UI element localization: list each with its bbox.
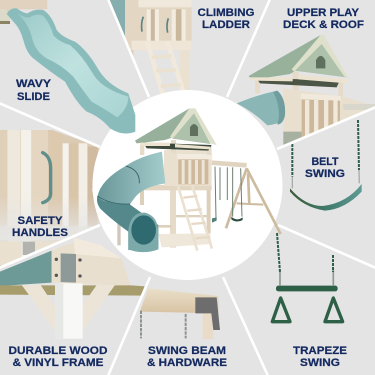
panel: belt swing	[290, 120, 362, 211]
label: belt swing: SWING	[305, 168, 345, 180]
label: swing beam and hardware	[147, 345, 227, 369]
panel: wood and vinyl frame photo	[0, 237, 150, 339]
label: safety handles	[12, 215, 68, 239]
panel: upper deck photo	[237, 35, 375, 152]
panel: climbing ladder photo	[110, 0, 192, 94]
label: swing beam and hardware: SWING BEAM	[148, 345, 226, 357]
deck and railing	[140, 185, 212, 190]
label: wavy slide	[16, 78, 51, 103]
label: belt swing: BELT	[312, 156, 339, 168]
label: trapeze swing: SWING	[300, 357, 340, 369]
label: climbing ladder	[198, 7, 254, 31]
lower tower	[170, 185, 176, 248]
panel: swing beam and hardware	[140, 288, 220, 339]
art: main play set circle	[92, 90, 282, 280]
roof	[143, 143, 212, 151]
ladder	[178, 186, 212, 251]
label: durable wood and vinyl frame	[8, 345, 108, 369]
icon: grab handle	[43, 153, 51, 203]
label: belt swing	[305, 156, 345, 180]
tube slide	[97, 152, 165, 205]
label: climbing ladder: LADDER	[202, 19, 250, 31]
label: trapeze swing: TRAPEZE	[293, 345, 347, 357]
label: safety handles: HANDLES	[12, 227, 68, 239]
label: upper play deck and roof: UPPER PLAY	[287, 7, 359, 19]
swing frame	[212, 163, 281, 234]
tube mouth	[237, 91, 285, 125]
label: wavy slide: WAVY	[16, 78, 51, 90]
label: wavy slide: SLIDE	[17, 91, 50, 103]
label: upper play deck and roof: DECK & ROOF	[283, 19, 365, 31]
label: climbing ladder: CLIMBING	[198, 7, 254, 19]
label: safety handles: SAFETY	[18, 215, 62, 227]
label: durable wood and vinyl frame: & VINYL FRAME	[12, 357, 104, 369]
label: trapeze swing	[293, 345, 347, 369]
label: durable wood and vinyl frame: DURABLE WOOD	[8, 345, 108, 357]
panel: trapeze swing	[272, 270, 343, 322]
illustration: central play set	[97, 108, 281, 252]
panel: safety handles photo	[0, 130, 103, 270]
trapeze chains through belt panel	[277, 233, 333, 272]
panel: wavy slide photo	[0, 0, 135, 134]
label: swing beam and hardware: & HARDWARE	[147, 357, 227, 369]
label: upper play deck and roof	[283, 7, 365, 31]
